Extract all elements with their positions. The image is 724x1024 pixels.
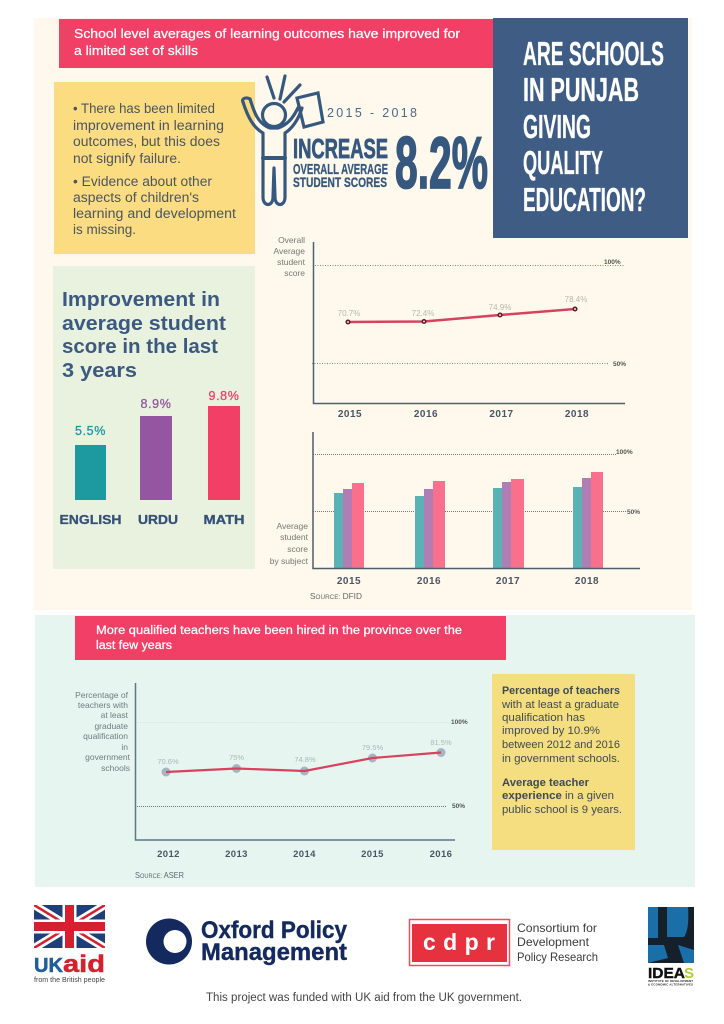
chart: overall average student score: 100% [604,259,621,266]
chart: teachers with graduate qualification: 2012 [157,849,180,860]
chart: teachers with graduate qualification: at least [101,710,129,720]
banner: qualified teachers heading: last few years [96,640,172,652]
banner: qualified teachers heading: More qualified teachers have been hired in the province over the [96,625,462,637]
subject labels [60,513,244,527]
banner: learning outcomes heading: School level averages of learning outcomes have improved for [74,27,460,41]
chart: overall average student score: 2015 [338,409,362,420]
logo: Oxford Policy Management: Management [201,939,347,966]
chart: teachers with graduate qualification: 2013 [225,849,248,860]
logo: CDPR [410,920,598,966]
chart: overall average student score: 78.4% [565,295,587,304]
logo: UK aid: aid [63,951,105,978]
bar: Urdu: 8.9% [141,397,171,411]
heading: improvement: score in the last [62,336,218,358]
chart: teachers with graduate qualification: 2014 [293,849,316,860]
chart: overall average student score: 70.7% [338,309,360,318]
logo: UK aid: UK [34,955,64,977]
chart: teachers with graduate qualification: graduate [94,721,128,731]
chart: average student score by subject: 2017 [496,576,520,587]
chart: teachers with graduate qualification: 70.6% [157,757,179,766]
footer: funding note: This project was funded with UK aid from the UK government. [206,992,522,1004]
chart: teachers with graduate qualification: 100% [451,719,468,726]
subject labels: MATH [204,513,244,527]
stat: increase 8.2%: OVERALL AVERAGE [293,161,388,178]
chart: teachers with graduate qualification: in [121,742,128,752]
chart: teachers with graduate qualification: teachers with [78,700,128,710]
chart: overall average student score: 2018 [565,409,589,420]
chart: teachers with graduate qualification: Percentage of [75,690,129,700]
logo: IDEAS: & ECONOMIC ALTERNATIVES [648,982,693,986]
heading: improvement: average student [62,313,226,335]
heading: improvement [62,289,226,382]
panel: qualified teachers [35,615,695,887]
title box [493,18,688,238]
callout: limited improvement: • Evidence about other [73,174,213,189]
icon: cheering student holding book [243,76,323,204]
callout: limited improvement: not signify failure. [73,151,181,166]
chart: teachers with graduate qualification [75,683,468,880]
logo: Oxford Policy Management: Oxford Policy [201,917,348,944]
banner: learning outcomes heading: a limited set of skills [74,44,198,58]
chart: average student score by subject: Average [276,521,308,531]
chart: average student score by subject: 2015 [337,576,361,587]
chart: average student score by subject: 50% [627,509,640,516]
callout: teacher statistics: qualification has [502,712,586,724]
heading: improvement: 3 years [62,360,137,382]
subject labels: ENGLISH [60,513,122,527]
bar: Math: 9.8% [209,389,239,403]
chart: overall average student score: 2016 [414,409,438,420]
chart: teachers with graduate qualification: schools [101,763,130,773]
callout: limited improvement: aspects of children's [73,190,199,205]
logo: IDEAS [648,907,694,986]
logo: IDEAS: S [684,965,694,982]
logo: Oxford Policy Management [146,917,348,966]
chart: overall average student score: student [277,257,306,267]
chart: overall average student score: 74.9% [489,303,511,312]
chart: overall average student score [273,235,626,420]
callout: teacher statistics: with at least a graduate [501,699,619,711]
bar: English: 5.5% [75,424,106,438]
callout: teacher statistics: experience in a given [502,790,614,802]
callout: teacher statistics: in government schools. [502,753,620,765]
bar: English [75,424,106,500]
callout: teacher statistics [492,674,635,850]
bar: Urdu [140,397,172,500]
logo: CDPR: cdpr [423,929,495,955]
chart: overall average student score: Overall [278,235,305,245]
banner: qualified teachers heading [75,616,506,660]
stat: increase 8.2%: 8.2% [395,123,488,204]
chart: teachers with graduate qualification: qualification [83,731,128,741]
stat: increase 8.2% [293,123,488,204]
stat: increase 8.2%: INCREASE [293,133,388,164]
logo: IDEAS: IDEA [648,965,685,982]
chart: teachers with graduate qualification: 2016 [430,849,452,860]
title box: QUALITY [523,144,603,181]
chart: average student score by subject [270,432,640,601]
panel: school learning outcomes [34,18,692,610]
logo: UK aid: from the British people [34,977,105,984]
chart: teachers with graduate qualification: 75% [229,753,244,762]
callout: limited improvement: learning and development [73,206,236,221]
chart: teachers with graduate qualification: 81.5% [430,738,452,747]
chart: average student score by subject: 100% [616,449,633,456]
chart: overall average student score: 50% [613,361,626,368]
chart: overall average student score: 72.4% [412,309,434,318]
source: ASER: SOURCE: ASER [135,870,184,880]
callout: limited improvement: is missing. [73,222,136,237]
banner: learning outcomes heading [59,19,493,68]
callout: limited improvement: improvement in learning [73,118,224,133]
callout: limited improvement: • There has been limited [73,101,215,116]
bar: Math [208,389,240,500]
chart: teachers with graduate qualification: 79.5% [362,743,383,752]
callout: limited improvement: outcomes, but this does [73,134,220,149]
logo: CDPR: Consortium for [517,921,597,935]
chart: average student score by subject: 2018 [575,576,599,587]
callout: teacher statistics: Average teacher [502,777,590,789]
logo: UK aid [34,905,105,984]
chart: teachers with graduate qualification: 50% [452,803,465,810]
subject labels: URDU [138,513,178,527]
heading: improvement: Improvement in [62,289,220,311]
logo: CDPR: Policy Research [517,950,598,964]
source: DFID: SOURCE: DFID [310,591,362,601]
title box: GIVING [523,108,591,145]
chart: teachers with graduate qualification: 74.8% [294,755,316,764]
panel: improvement by subject [53,266,255,569]
chart: average student score by subject: 2016 [417,576,441,587]
callout: teacher statistics: public school is 9 years. [502,804,622,816]
chart: overall average student score: Average [273,246,305,256]
logo: CDPR: Development [517,935,590,949]
callout: limited improvement [54,82,255,254]
chart: teachers with graduate qualification: government [85,752,131,762]
stat: years: 2015 - 2018 [327,106,417,120]
chart: overall average student score: 2017 [489,409,514,420]
chart: average student score by subject: score [287,544,308,554]
logo: IDEAS: INSTITUTE OF DEVELOPMENT [648,979,693,983]
chart: teachers with graduate qualification: 2015 [361,849,384,860]
chart: average student score by subject: student [280,532,309,542]
stat: increase 8.2%: STUDENT SCORES [293,174,387,190]
title box: IN PUNJAB [523,71,639,108]
callout: teacher statistics: between 2012 and 2016 [502,739,620,751]
chart: overall average student score: score [284,268,305,278]
chart: average student score by subject: by subject [270,556,309,566]
callout: teacher statistics: Percentage of teachers [502,685,620,697]
callout: teacher statistics: improved by 10.9% [502,725,600,737]
